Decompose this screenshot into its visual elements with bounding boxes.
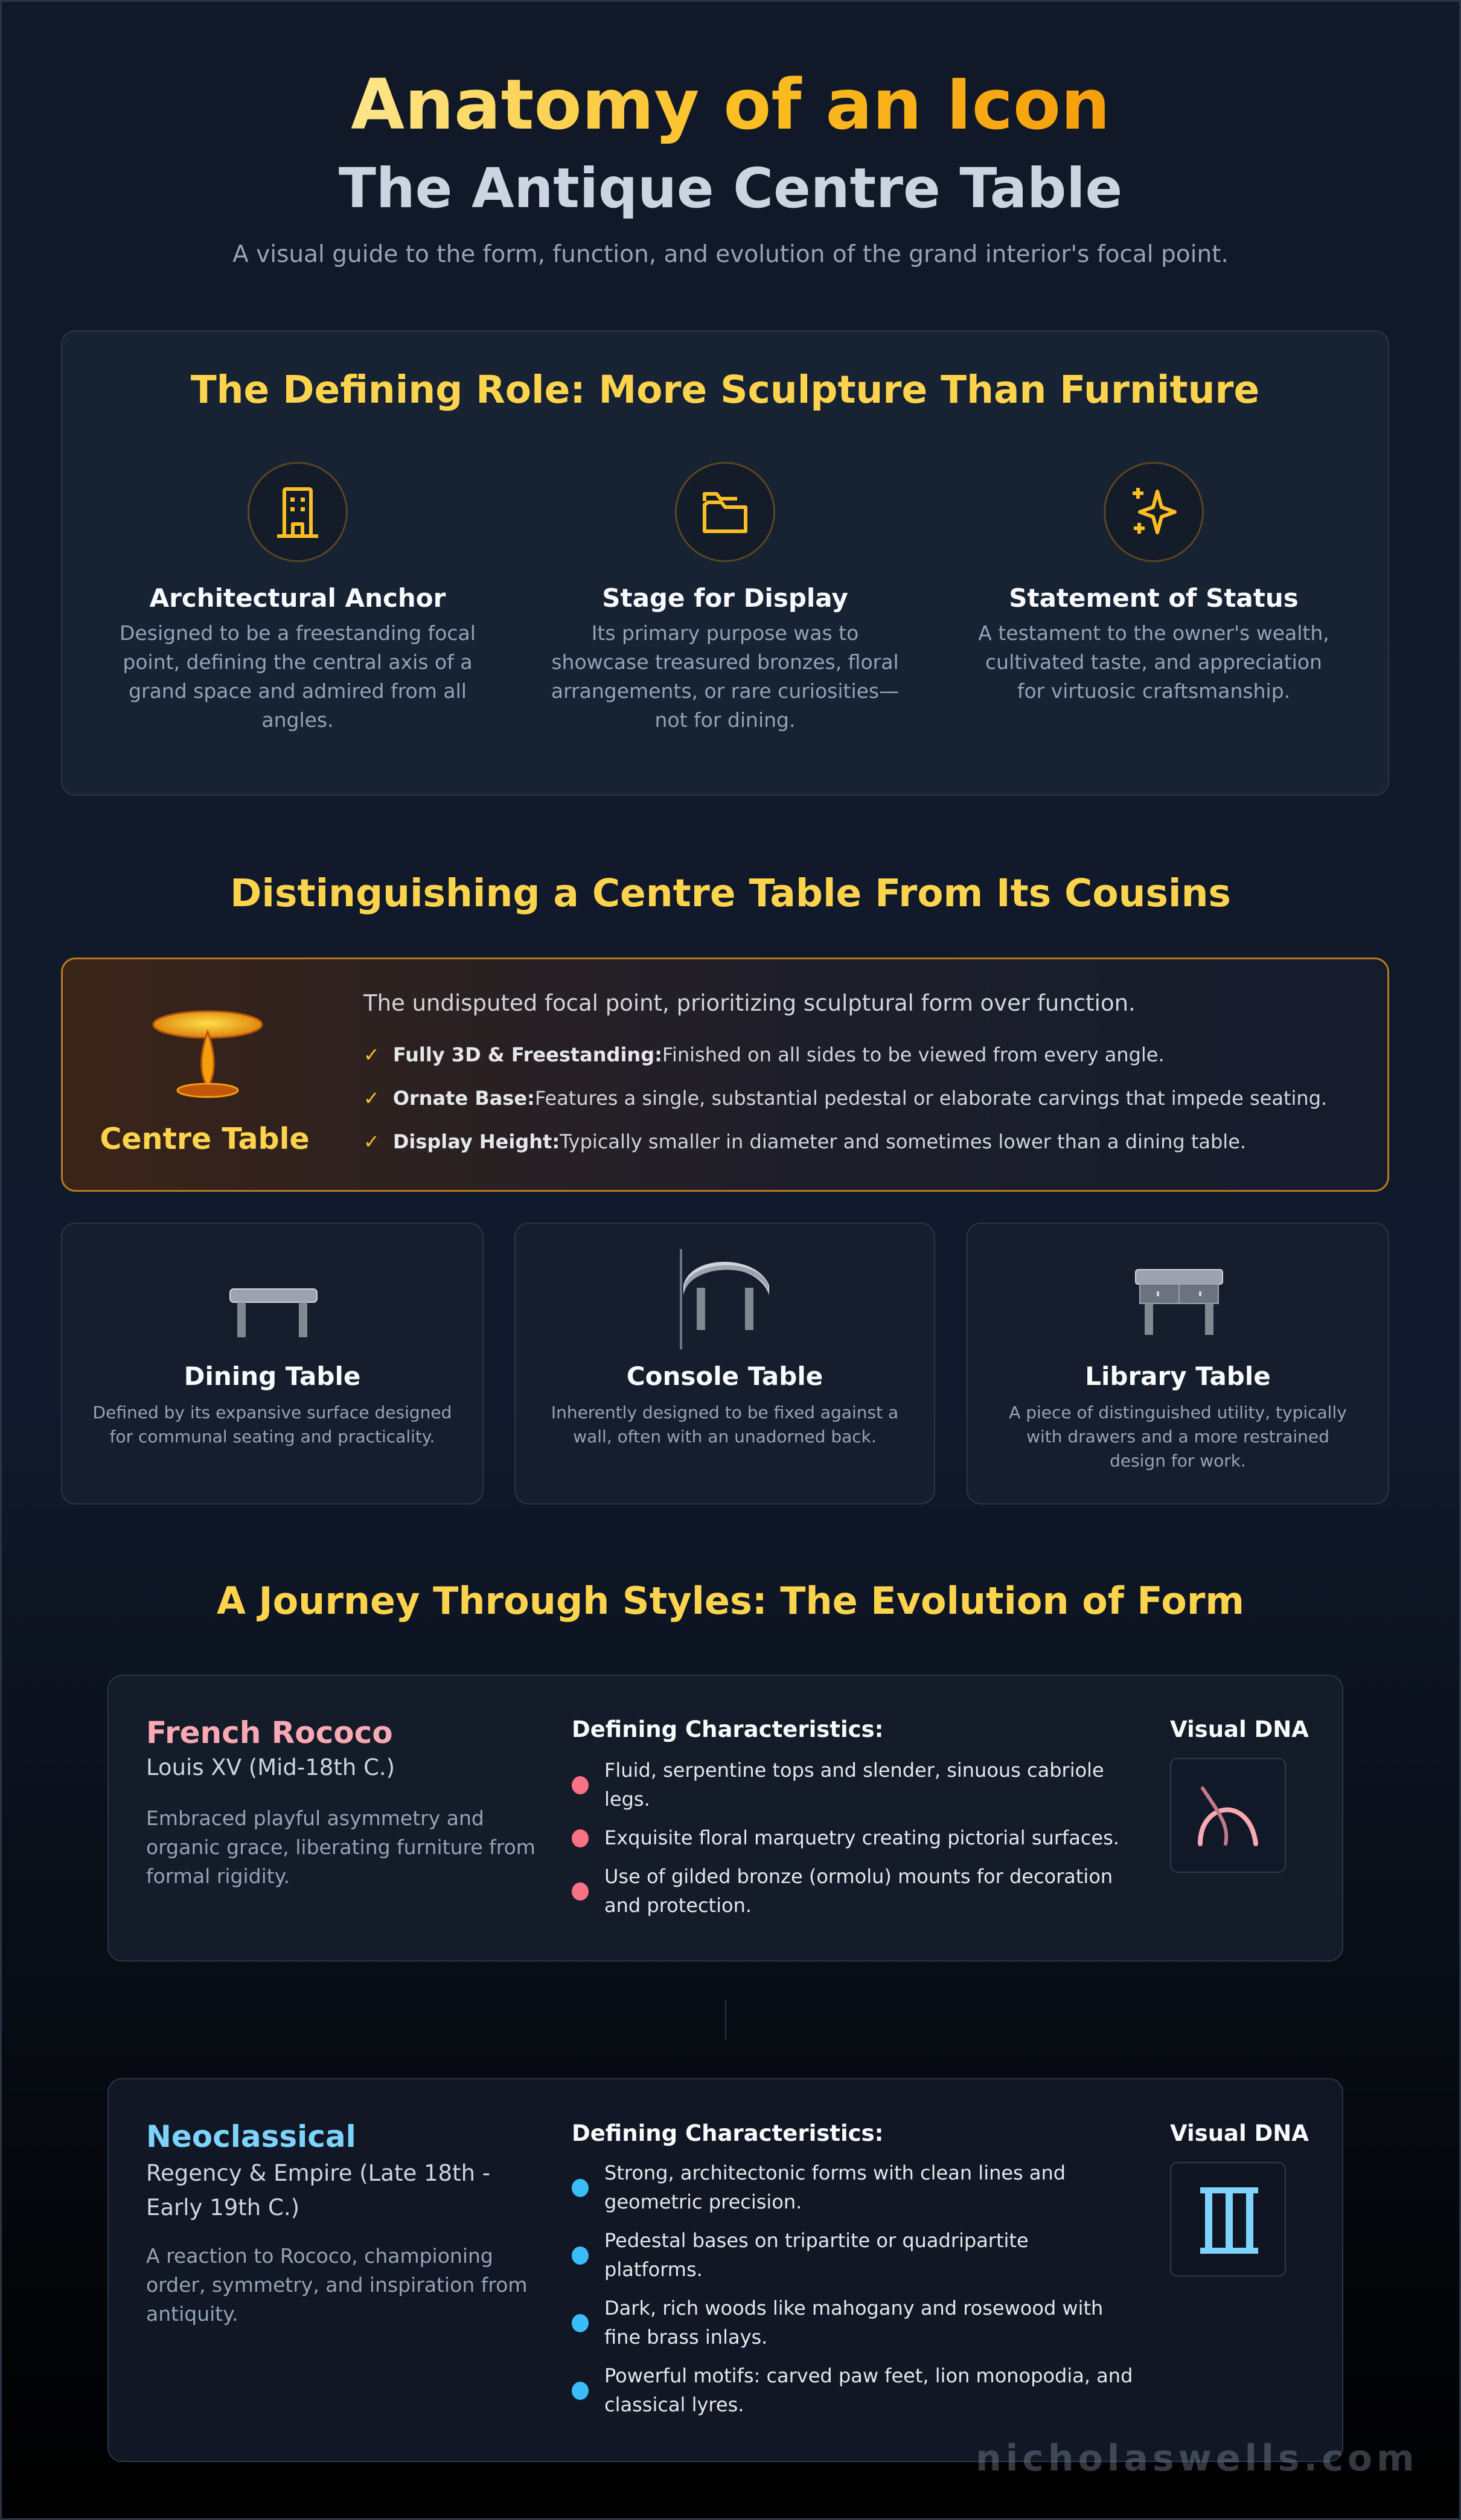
card: console table: Inherently designed to be fixed against a wall, often with an unadorned back. [551,1402,898,1447]
heading: journey: A Journey Through Styles: The Evolution of Form [217,1579,1244,1623]
text: centre table features: The undisputed focal point, prioritizing sculptural form over function. [363,990,1136,1016]
list: neoclassical characteristics: Powerful motifs: carved paw feet, lion monopodia, and classical lyres. [604,2364,1133,2416]
card: neoclassical: Regency & Empire (Late 18th - Early 19th C.) [146,2160,490,2221]
panel: defining role [61,330,1389,796]
card: french rococo: Embraced playful asymmetry and organic grace, liberating furniture from formal rigidity. [146,1806,535,1888]
text: centre table features [363,990,1327,1153]
list: neoclassical characteristics [572,2120,1133,2416]
item: architectural anchor: Architectural Anchor [150,583,446,613]
icon: library table [1135,1269,1223,1335]
card: neoclassical: A reaction to Rococo, championing order, symmetry, and inspiration from antiquity. [146,2244,528,2326]
item: stage for display [551,462,899,732]
list: rococo characteristics: Use of gilded bronze (ormolu) mounts for decoration and protection. [604,1865,1113,1917]
panel: centre table [61,958,1389,1192]
item: architectural anchor [120,462,476,732]
watermark: nicholaswells.com [976,2437,1419,2480]
card: dining table: Defined by its expansive surface designed for communal seating and practicality. [93,1402,452,1447]
visual dna: rococo [1170,1716,1309,1873]
item: statement of status: Statement of Status [1009,583,1299,613]
card: library table [967,1223,1389,1505]
item: architectural anchor: Designed to be a freestanding focal point, defining the central axis of a grand space and admired from all angles. [120,621,476,732]
label: centre table: Centre Table [100,1122,310,1156]
list: neoclassical characteristics: Dark, rich woods like mahogany and rosewood with fine brass inlays. [604,2297,1103,2349]
list: rococo characteristics: Fluid, serpentine tops and slender, sinuous cabriole legs. [604,1759,1104,1811]
card: library table: A piece of distinguished utility, typically with drawers and a more restrained design for work. [1009,1402,1347,1471]
card: french rococo: Louis XV (Mid-18th C.) [146,1754,395,1780]
title: neoclassical: Neoclassical [146,2119,356,2154]
text: centre table features: ✓ Ornate Base:Features a single, substantial pedestal or elaborate carvings that impede seating. [363,1087,1327,1110]
list: rococo characteristics: Exquisite floral marquetry creating pictorial surfaces. [604,1826,1119,1849]
list: neoclassical characteristics: Defining Characteristics: [572,2120,883,2146]
icon: sparkles [1104,462,1204,562]
visual dna: rococo: Visual DNA [1170,1716,1309,1742]
item: statement of status [978,462,1329,703]
text: centre table features: ✓ Display Height:Typically smaller in diameter and sometimes lower than a dining table. [363,1130,1246,1153]
heading: defining role: The Defining Role: More Sculpture Than Furniture [191,368,1259,412]
card: neoclassical [107,2078,1343,2462]
list: neoclassical characteristics: Pedestal bases on tripartite or quadripartite platforms. [604,2229,1029,2281]
visual dna: neoclassical: Visual DNA [1170,2120,1309,2146]
list: rococo characteristics: Defining Characteristics: [572,1716,883,1742]
item: stage for display: Stage for Display [602,583,848,613]
tagline: A visual guide to the form, function, and evolution of the grand interior's focal point. [232,241,1229,268]
card: dining table: Dining Table [184,1361,360,1391]
card: console table: Console Table [627,1361,823,1391]
card: french rococo [107,1675,1343,1962]
connector line [725,2001,726,2041]
icon: centre table [152,1011,263,1098]
card: console table [514,1223,935,1505]
heading: distinguishing: Distinguishing a Centre Table From Its Cousins [230,871,1231,915]
card: library table: Library Table [1085,1361,1271,1391]
text: centre table features: ✓ Fully 3D & Freestanding:Finished on all sides to be viewed from every angle. [363,1043,1165,1066]
title: Anatomy of an Icon [351,65,1110,146]
icon: dining table [229,1288,318,1337]
icon: folder [675,462,775,562]
item: statement of status: A testament to the owner's wealth, cultivated taste, and appreciation for virtuosic craftsmanship. [978,621,1329,703]
icon: building [248,462,348,562]
title: french rococo: French Rococo [146,1715,393,1750]
card: dining table [61,1223,484,1505]
list: neoclassical characteristics: Strong, architectonic forms with clean lines and geometric precision. [604,2161,1066,2213]
visual dna: neoclassical [1170,2120,1309,2277]
icon: console table [680,1249,769,1349]
subtitle: The Antique Centre Table [339,157,1122,220]
item: stage for display: Its primary purpose was to showcase treasured bronzes, floral arrangements, or rare curiosities—not for dining. [551,621,899,732]
list: rococo characteristics [572,1716,1119,1917]
